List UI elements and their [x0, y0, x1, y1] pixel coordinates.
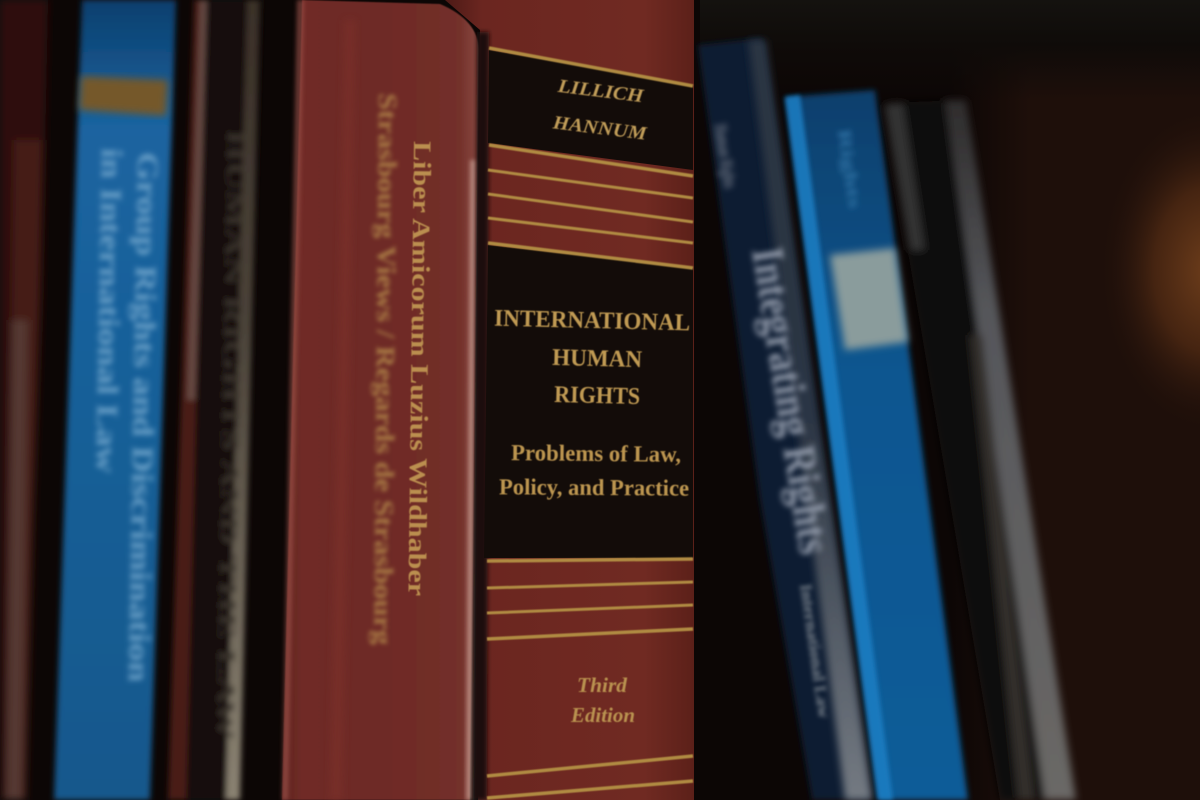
book: dark narrow spine — [168, 0, 262, 800]
text: blue book title: in International Law — [89, 148, 128, 474]
text: edition — [570, 673, 635, 727]
text: Liber Amicorum Luzius Wildhaber: Liber Amicorum Luzius Wildhaber — [402, 141, 435, 596]
text: navy book footer: International Law — [796, 583, 834, 720]
text: authors: HANNUM — [551, 112, 649, 145]
text: edition: Edition — [570, 703, 635, 727]
book: red Liber Amicorum — [282, 0, 479, 800]
text: Strasbourg Views: Strasbourg Views / Regards de Strasbourg — [368, 93, 402, 645]
book: far-left red spine — [0, 0, 48, 800]
text: blue book title: Group Rights and Discrimination — [122, 152, 164, 683]
text: edition: Third — [577, 673, 628, 697]
book: navy Integrating Rights — [698, 38, 872, 800]
text: book title: RIGHTS — [554, 382, 640, 410]
text: navy book heading: Human Rights — [709, 122, 740, 190]
text: book title: INTERNATIONAL — [494, 306, 690, 336]
book: left blue spine — [54, 0, 176, 800]
text: subtitle: Problems of Law, — [511, 440, 681, 467]
icon: pale label on blue book — [830, 248, 908, 350]
panel: author label — [488, 50, 693, 170]
book: right blue spine — [785, 90, 968, 800]
text: authors — [551, 76, 649, 145]
book: main International Human Rights spine — [445, 0, 694, 800]
panel: title label — [484, 245, 693, 558]
text: blue book title — [89, 148, 164, 683]
book: right dark grey spine — [883, 100, 1076, 800]
text: blue book heading: Rights — [834, 128, 865, 210]
text: subtitle: Policy, and Practice — [499, 474, 689, 501]
text: subtitle — [499, 440, 689, 501]
text: book title: HUMAN — [552, 345, 643, 373]
book: dark narrow spine: HUMAN RIGHTS AND THE LAW — [211, 130, 248, 740]
gold rules — [487, 48, 693, 798]
text: authors: LILLICH — [556, 76, 646, 107]
text: navy book title: Integrating Rights — [742, 244, 841, 558]
text: book title — [494, 306, 690, 410]
